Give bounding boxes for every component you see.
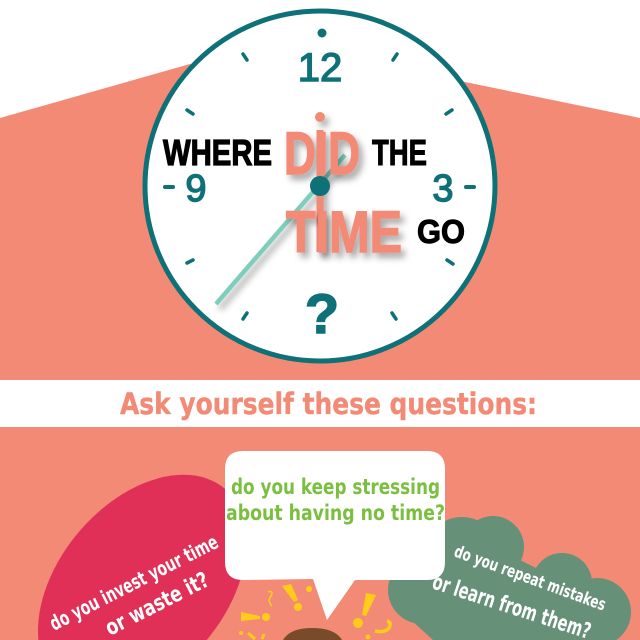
speech bubble text [226, 475, 445, 525]
speech bubble text: do you keep stressing [231, 475, 440, 499]
title word: TIME: TIME [286, 200, 402, 265]
title word: GO: GO [417, 213, 465, 250]
title word: DID [284, 112, 360, 252]
red bubble text: or waste it? [101, 568, 213, 640]
clock hub [310, 176, 330, 196]
title word: THE: THE [372, 132, 427, 173]
red bubble text [45, 530, 222, 640]
numeral 3: 3 [432, 168, 454, 210]
stress marks [239, 584, 390, 640]
character head [283, 628, 342, 640]
clock face [145, 11, 495, 361]
heading: ask yourself: Ask yourself these questions: [120, 387, 537, 421]
background: salmon roof panel [0, 50, 640, 380]
minute hand [216, 155, 345, 304]
green cloud bubble [388, 516, 631, 640]
red ellipse bubble [38, 475, 247, 640]
white speech bubble [225, 451, 445, 620]
question mark: ? [305, 282, 339, 345]
clock [145, 11, 495, 361]
panel: question band [0, 380, 640, 427]
numeral 12: 12 [298, 46, 342, 90]
title word: WHERE: WHERE [163, 132, 272, 173]
numeral 9: 9 [185, 168, 207, 210]
red bubble text: do you invest your time [45, 530, 222, 635]
clock ticks [165, 54, 474, 319]
speech bubble text: about having no time? [226, 501, 445, 525]
panel: lower salmon background [0, 427, 640, 640]
top dot marker [318, 28, 326, 38]
title word: DID: DID [284, 120, 360, 187]
